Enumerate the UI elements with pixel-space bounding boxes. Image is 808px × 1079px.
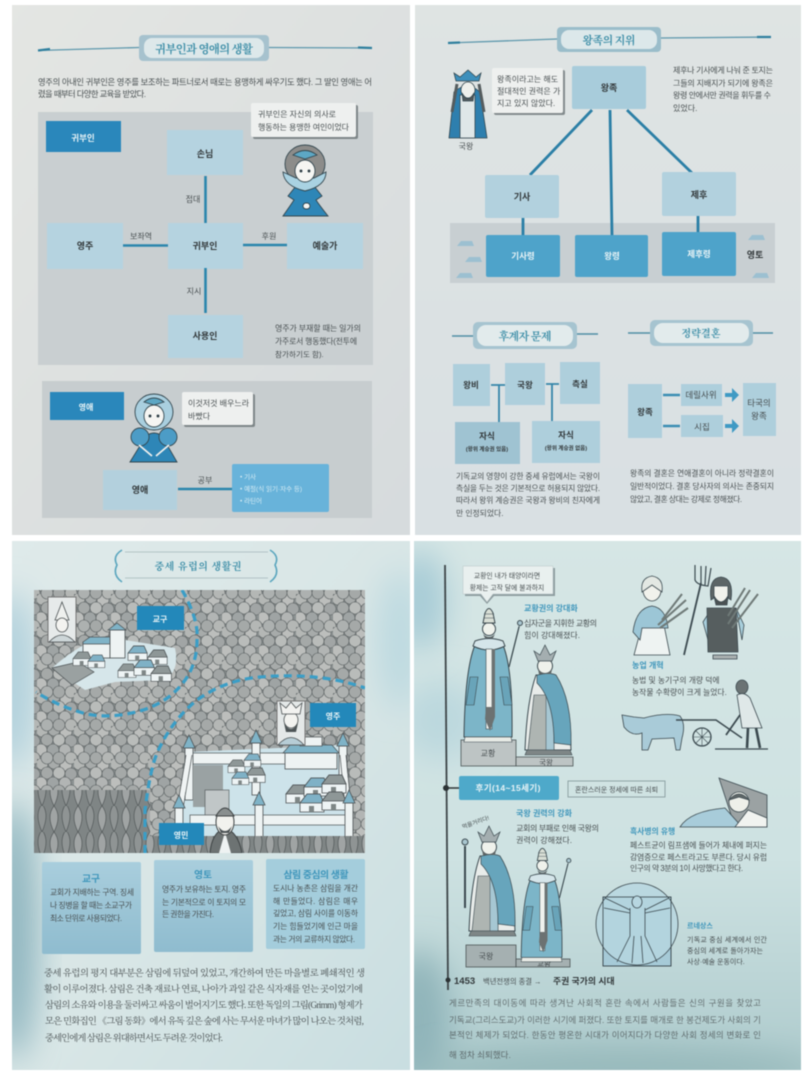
card: 교구: 교회가 지배하는 구역. 징세 (50, 887, 134, 897)
tag: 귀부인 (46, 121, 121, 152)
dashed border: manor (145, 676, 365, 853)
illustration: pope above king (461, 608, 573, 767)
connector: 공부 (178, 476, 232, 489)
title: 중세 유럽의 생활권: 중세 유럽의 생활권 (154, 560, 242, 573)
box: 타국의 왕족: 왕족 (751, 411, 767, 421)
box: other child: 자식 (558, 430, 574, 440)
body text (449, 998, 761, 1060)
speech bubble: pope (463, 566, 555, 604)
card: 교구: 나 징병을 할 때는 소교구가 (50, 900, 132, 910)
heading: 1453: 주권 국가의 시대 (553, 975, 615, 986)
callout: brave woman (251, 103, 358, 139)
callout: busy learning: 이것저것 배우느라 (188, 398, 250, 408)
illustration: Vitruvian man (596, 883, 678, 966)
box: 귀부인 center (168, 223, 243, 269)
clearing: church village (52, 623, 176, 690)
text: land note: 왕령 안에서만 권력을 휘두를 수 (673, 90, 771, 100)
text: renaissance: 중심의 세계로 돌아가자는 (687, 946, 764, 955)
box: 손님: 손님 (197, 148, 213, 159)
label: king shout: 먹을거리다! (461, 814, 491, 831)
card: 영토: 영주가 보유하는 토지. 영주 (162, 884, 246, 894)
title: 중세 유럽의 생활권 (115, 550, 277, 582)
illustration: king above pope (462, 826, 571, 968)
box: 왕비 (453, 364, 490, 406)
tag: 영주: 영주 (326, 711, 341, 721)
text: succession note: 측실을 두는 것은 기본적으로 허용되지 않았다. (456, 483, 600, 493)
text: papal power (524, 603, 597, 640)
body text: 기독교(그리스도교)가 이러한 시기에 퍼졌다. 또한 토지를 매개로 한 봉건제도가 사회의 기 (449, 1015, 761, 1025)
text: papal power: 십자군을 지휘한 교황의 (524, 618, 597, 628)
text: royal power: 국왕 권력의 강화 (516, 808, 573, 818)
text: succession note: 만 인정되었다. (456, 508, 503, 518)
portrait: peasant (210, 808, 242, 853)
box: 데릴사위: 데릴사위 (685, 390, 717, 400)
box: 왕령 (575, 235, 648, 277)
text: succession note (456, 471, 600, 518)
text: black death: 흑사병의 유행 (630, 826, 675, 836)
clearing: castle town (150, 730, 365, 860)
intro text (38, 77, 372, 99)
box: 왕족 (572, 66, 646, 109)
body text: 본적인 체제가 되었다. 한동안 평온한 시대가 이어지다가 다양한 사회 정세의 변화로 인 (449, 1030, 761, 1040)
body text: 해 점차 쇠퇴했다. (449, 1050, 511, 1060)
text: succession note: 기독교의 영향이 강한 중세 유럽에서는 국왕이 (456, 471, 600, 481)
box: 사용인: 사용인 (193, 331, 217, 341)
connectors: hierarchy (523, 110, 698, 236)
box: 제후령: 제후령 (687, 249, 711, 259)
page: late middle ages timeline (390, 541, 808, 1079)
box: study list (232, 464, 329, 512)
card: 삼림 중심의 생활: 삼림 중심의 생활 (284, 868, 348, 881)
tag: 교구 (137, 606, 184, 630)
text: marriage note: 않았고, 결혼 상대는 강제로 정해졌다. (630, 494, 742, 504)
tag: 후기 14~15세기 (459, 776, 559, 800)
territory panel: 영토: 영토 (747, 249, 763, 260)
page: medieval living area (0, 541, 422, 1070)
tag: 영민 (159, 823, 204, 845)
diagram: succession (453, 362, 600, 464)
text: land note: 있었다. (673, 103, 697, 113)
connectors with labels: 보좌역 (130, 231, 152, 241)
body text (44, 967, 365, 1044)
text: black death: 인구의 약 3분의 1이 사망했다고 한다. (630, 863, 743, 873)
box: 영주 (47, 223, 123, 269)
page: royal status (415, 5, 801, 535)
tag: 귀부인: 귀부인 (71, 133, 95, 143)
text: agricultural reform: 농작물 수확량이 크게 늘었다. (632, 687, 727, 697)
box: 시집: 시집 (694, 422, 710, 432)
box: 사용인 (168, 315, 243, 358)
box: 타국의 왕족: 타국의 (747, 398, 771, 408)
text: papal power: 힘이 강대해졌다. (524, 630, 580, 640)
box: study list: • 기사 (240, 472, 256, 481)
box: other child: (왕위 계승권 없음) (545, 444, 587, 452)
territory panel: 영토 (450, 223, 775, 283)
box: 영애: 영애 (132, 484, 148, 495)
icon: king figure (449, 70, 487, 138)
text: land note: 그들의 지배지가 되기에 왕족은 (673, 78, 773, 88)
text: black death (630, 826, 767, 873)
illustration: king above pope: 교황 (537, 958, 551, 968)
connectors with labels (123, 176, 287, 313)
box: 예술가: 예술가 (313, 240, 338, 251)
tag: 영주 (310, 703, 356, 727)
callout: brave woman: 행동하는 용맹한 여인이었다 (258, 122, 350, 132)
body text: 게르만족의 대이동에 따라 생겨난 사회적 혼란 속에서 사람들은 신의 구원을 찾았고 (449, 998, 761, 1008)
body text: 중세인에게 삼림은 위대하면서도 두려운 것이었다. (45, 1032, 223, 1044)
speech bubble: pope: 교황인 내가 태양이라면 (474, 571, 540, 580)
map: forest with regions (34, 590, 365, 860)
text: marriage note (630, 468, 774, 504)
card: 삼림 중심의 생활: 도시나 농촌은 삼림을 개간 (273, 883, 358, 893)
body text: 활이 이루어졌다. 삼림은 건축 재료나 연료, 나아가 과일 같은 식자재를 얻는 곳이었기에 (44, 983, 363, 995)
callout: royal power: 지고 있지 않았다. (497, 98, 555, 108)
text: land note: 제후나 기사에게 나눠 준 토지는 (673, 65, 773, 75)
title banner: 왕족의 지위: 왕족의 지위 (582, 33, 636, 47)
card: 영토: 영토 (194, 868, 212, 881)
box: other child (532, 421, 600, 463)
connector: 공부: 공부 (198, 476, 212, 485)
connectors with labels: 접대 (186, 194, 200, 204)
box: 영주: 영주 (77, 240, 93, 251)
tag: 영애 (50, 392, 124, 420)
box: 데릴사위 (681, 384, 722, 406)
portrait: bishop (48, 597, 76, 642)
callout: busy learning: 바빴다 (188, 411, 211, 421)
tag: chaotic decline: 혼란스러운 정세에 따른 쇠퇴 (575, 785, 658, 794)
box: 왕족 (628, 384, 662, 438)
callout: brave woman: 귀부인은 자신의 의사로 (258, 109, 336, 119)
box: 국왕 (505, 363, 545, 405)
box: 제후령 (662, 232, 736, 276)
tag: 후기 14~15세기: 후기(14~15세기) (476, 783, 541, 793)
portrait: lord (277, 701, 305, 745)
arrow: to foreign royalty 2 (725, 419, 739, 433)
title banner: 왕족의 지위 (448, 27, 771, 52)
icon: noblewoman figure (283, 145, 328, 216)
text: royal power: 권력이 강해졌다. (516, 835, 572, 845)
page: noblewoman and daughter life (12, 5, 410, 535)
illustration: plague patient (680, 778, 767, 827)
card: 영토: 는 기본적으로 이 토지의 모 (162, 897, 246, 907)
illustration: king above pope: 국왕 (479, 952, 494, 961)
card: 교구 (42, 862, 141, 954)
box: 기사령 (486, 235, 560, 277)
illustration: pope above king: 교황 (481, 748, 496, 758)
callout: royal power: 절대적인 권력은 가 (497, 86, 561, 96)
heading: 후계자 문제: 후계자 문제 (498, 329, 552, 343)
text: renaissance: 사상·예술 운동이다. (687, 957, 745, 966)
connectors with labels: 지시 (187, 287, 201, 296)
callout: royal power (492, 68, 565, 115)
box: 제후 (662, 172, 736, 216)
timeline axis (443, 565, 459, 990)
card: 영토 (154, 860, 253, 952)
card: 삼림 중심의 생활: 과는 거의 교류하지 않았다. (273, 934, 355, 944)
box: 손님 (167, 130, 243, 175)
card: 삼림 중심의 생활: 기는 힘들었기에 인근 마을 (273, 921, 358, 931)
title banner: 귀부인과 영애의 생활: 귀부인과 영애의 생활 (155, 42, 254, 56)
dashed border: church district (36, 590, 197, 716)
tag: 교구: 교구 (153, 615, 168, 624)
text: marriage note: 일반적이었다. 결혼 당사자의 의사는 존중되지 (630, 481, 774, 491)
text: black death: 페스트균이 림프샘에 들어가 체내에 퍼지는 (630, 840, 767, 850)
text: papal power: 교황권의 강대화 (524, 603, 578, 613)
note text: 참가하기도 함). (275, 349, 324, 359)
connectors with labels: 후원 (262, 232, 276, 241)
callout: royal power: 왕족이라고는 해도 (497, 74, 558, 84)
intro text: 렸을 때부터 다양한 교육을 받았다. (38, 89, 146, 99)
intro text: 영주의 아내인 귀부인은 영주를 보조하는 파트너로서 때로는 용맹하게 싸우기도 했다. 그 딸인 영애는 어 (38, 77, 372, 87)
box: study list: • 예절(식 읽기·자수 등) (240, 484, 302, 493)
box: 기사: 기사 (514, 191, 531, 202)
note text: 영주가 부재할 때는 일가의 (275, 323, 361, 333)
heading: 1453: 백년전쟁의 종결 → (483, 977, 541, 986)
heading: 1453 (454, 975, 615, 987)
text: succession note: 따라서 왕위 계승권은 국왕과 왕비의 친자에게 (456, 495, 600, 505)
text: agricultural reform: 농법 및 농기구의 개량 덕에 (632, 675, 720, 685)
box: 시집 (681, 415, 723, 437)
card: 교구: 최소 단위로 사용되었다. (50, 913, 122, 923)
text: land note (673, 65, 773, 113)
tag: 영애: 영애 (79, 402, 93, 412)
card: 삼림 중심의 생활 (266, 859, 365, 949)
card: 삼림 중심의 생활: 깊었고, 삼림 사이를 이동하 (273, 908, 358, 918)
callout: busy learning (182, 392, 255, 427)
text: renaissance: 기독교 중심 세계에서 인간 (687, 935, 768, 944)
card: 삼림 중심의 생활: 해 만들었다. 삼림은 매우 (273, 896, 358, 906)
heading: 1453: 1453 (454, 976, 475, 987)
heading: 정략결혼: 정략결혼 (682, 327, 721, 340)
box: 국왕: 국왕 (517, 380, 533, 390)
note text: 가주로서 행동했다(전투에 (275, 336, 357, 346)
title banner: 귀부인과 영애의 생활 (38, 35, 372, 61)
text: royal power: 교회의 부패로 인해 국왕의 (516, 823, 599, 833)
box: 왕족: 왕족 (637, 407, 653, 417)
box: legitimate child: 자식 (479, 431, 495, 441)
box: legitimate child: (왕위 계승권 있음) (466, 445, 508, 453)
note text (275, 323, 361, 359)
heading: 후계자 문제 (452, 322, 598, 349)
card: 교구: 교구 (82, 873, 100, 885)
body text: 삼림의 소유와 이용을 둘러싸고 싸움이 벌어지기도 했다. 또한 독일의 그림(Grimm) 형제가 (45, 999, 363, 1011)
heading: 정략결혼 (628, 320, 773, 346)
text: renaissance: 르네상스 (687, 921, 713, 930)
label: 국왕: 국왕 (459, 142, 474, 151)
text: agricultural reform (632, 660, 727, 697)
box: study list: • 라틴어 (240, 496, 262, 505)
box: 측실: 측실 (572, 379, 588, 389)
panel: daughter (42, 381, 372, 518)
illustration: pope above king: 국왕 (539, 758, 553, 767)
box: 제후: 제후 (691, 189, 707, 200)
tag: 영민: 영민 (174, 830, 188, 840)
arrow: to foreign royalty 1 (725, 388, 739, 402)
diagram: political marriage (628, 383, 776, 438)
text: renaissance (687, 921, 768, 966)
box: 왕령: 왕령 (604, 251, 620, 261)
text: agricultural reform: 농업 개혁 (632, 660, 664, 670)
text: black death: 감염증으로 페스트라고도 부른다. 당시 유럽 (630, 852, 767, 862)
text: marriage note: 왕족의 결혼은 연애결혼이 아니라 정략결혼이 (630, 468, 774, 478)
speech bubble: pope: 황제는 고작 달에 불과하지 (470, 583, 544, 592)
box: legitimate child (455, 422, 520, 464)
tag: chaotic decline (568, 781, 665, 797)
illustration: plowing with ox (622, 680, 768, 750)
box: 예술가 (287, 223, 363, 269)
box: 측실 (560, 362, 600, 404)
text: royal power (516, 808, 599, 845)
card: 영토: 든 권한을 가진다. (162, 909, 214, 919)
body text: 모은 민화집인 《그림 동화》에서 유독 깊은 숲에 사는 무서운 마녀가 많이 나오는 것처럼, (45, 1015, 364, 1027)
box: 왕족: 왕족 (601, 82, 617, 93)
body text: 중세 유럽의 평지 대부분은 삼림에 뒤덮여 있었고, 개간하여 만든 마을별로 폐쇄적인 생 (44, 967, 365, 979)
box: 왕비: 왕비 (463, 380, 479, 390)
panel: noblewoman relations (38, 103, 373, 365)
box: 영애 (103, 470, 177, 510)
box: 타국의 왕족 (743, 383, 776, 436)
box: 기사령: 기사령 (511, 251, 535, 261)
illustration: farmers (633, 565, 758, 659)
icon: young lady figure (130, 394, 177, 462)
box: 귀부인 center: 귀부인 (193, 241, 217, 251)
box: 기사 (485, 175, 559, 218)
